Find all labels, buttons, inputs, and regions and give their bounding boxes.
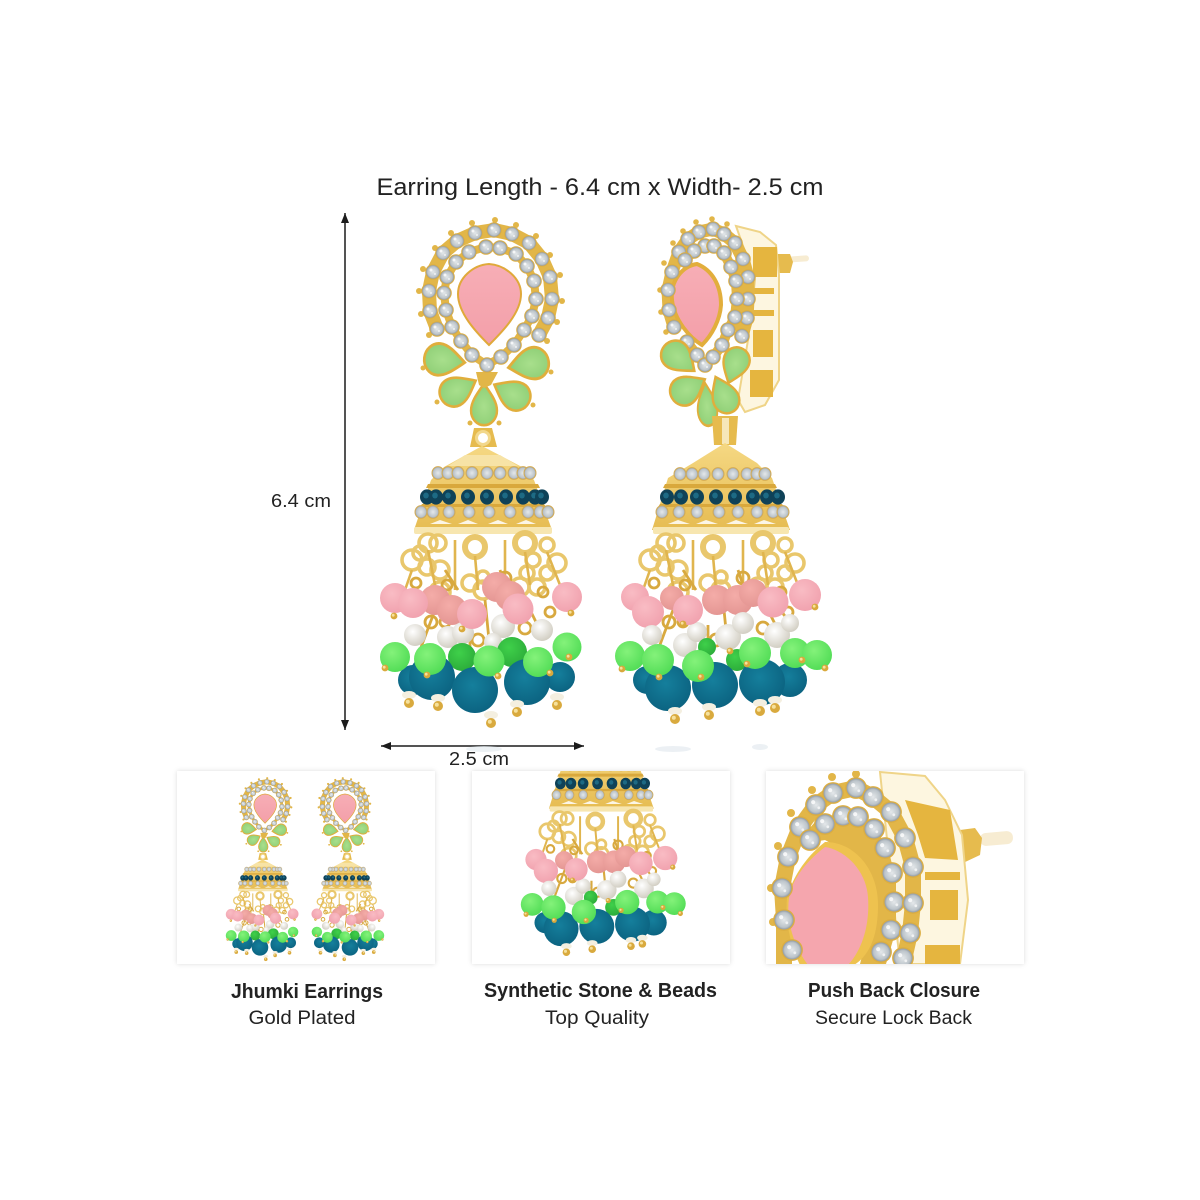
side bell dome [652, 443, 790, 534]
side earring: bell dome, chains and beads [615, 443, 832, 724]
caption: jhumki earrings [231, 981, 383, 1029]
bell dome with stone bands [414, 428, 554, 534]
stud with pink and green stones [416, 217, 565, 426]
panel: synthetic stone and beads thumbnail [470, 770, 732, 966]
label: height: 6.4 cm [271, 491, 331, 511]
panel: push back closure thumbnail [766, 770, 1024, 969]
side chains [640, 533, 804, 650]
label: width: 2.5 cm [449, 749, 509, 769]
side beads [615, 579, 832, 724]
caption: jhumki earrings: Jhumki Earrings [231, 981, 383, 1003]
caption: synthetic stone and beads [484, 980, 717, 1029]
panel: jhumki earrings thumbnail [177, 771, 435, 964]
stud gold and stones close-up [767, 770, 924, 969]
pink, pearl, teal and green beads [380, 572, 582, 728]
filigree back close-up [880, 772, 968, 964]
thumbnail earring left [226, 777, 299, 961]
caption: push back closure: Push Back Closure [808, 980, 980, 1002]
reflection under earrings [466, 744, 768, 752]
caption: synthetic stone and beads: Top Quality [545, 1008, 650, 1029]
arrow: width dimension [381, 745, 584, 747]
push back post [777, 254, 809, 273]
filigree back [736, 226, 779, 412]
stud stones [655, 216, 756, 445]
earring: side view stud [655, 216, 809, 445]
arrow: height dimension [344, 213, 346, 730]
post close-up [960, 828, 1013, 863]
bead close-up [520, 771, 686, 956]
caption: push back closure: Secure Lock Back [815, 1008, 973, 1029]
chains and hanging rings [402, 533, 566, 650]
caption: push back closure [808, 980, 980, 1029]
caption: jhumki earrings: Gold Plated [248, 1008, 356, 1029]
title: Earring Length - 6.4 cm x Width- 2.5 cm [376, 174, 824, 201]
earring: front view [380, 217, 582, 728]
thumbnail earring right [311, 777, 384, 961]
caption: synthetic stone and beads: Synthetic Stone & Beads [484, 980, 717, 1002]
